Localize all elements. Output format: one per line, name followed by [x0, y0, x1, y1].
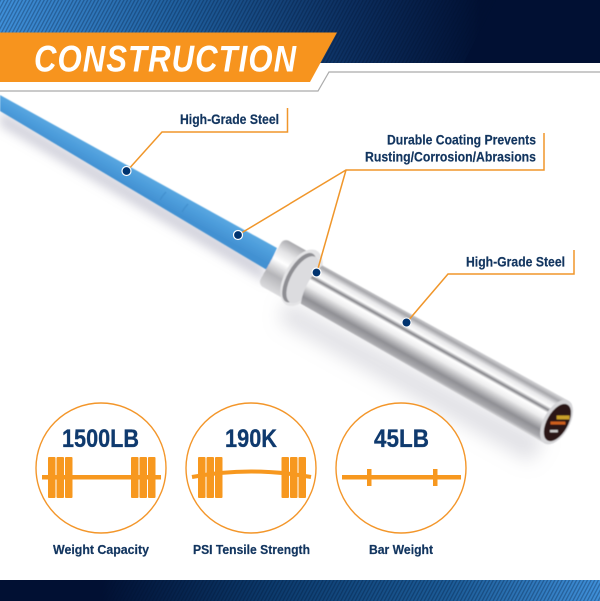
- end cap logo: [557, 415, 570, 419]
- label: High-Grade Steel: [466, 254, 565, 270]
- stat: psi tensile strength: [186, 403, 316, 557]
- icon: bending barbell: [192, 457, 311, 498]
- bottom banner: [0, 580, 600, 601]
- sleeve: [296, 261, 569, 443]
- marker dot on collar: [312, 268, 321, 277]
- marker dot: [122, 166, 131, 176]
- barbell shadow: [0, 110, 545, 462]
- value: 190K: [225, 425, 277, 453]
- icon: empty bar: [342, 469, 461, 486]
- value: 1500LB: [62, 425, 139, 453]
- callout: high-grade steel shaft: [122, 108, 288, 176]
- callout: high-grade steel sleeve: [402, 250, 574, 327]
- barbell photo: [0, 95, 584, 455]
- marker dot: [402, 318, 411, 327]
- steel sleeve assembly: [256, 234, 584, 455]
- top banner: [0, 0, 600, 63]
- collar neck: [258, 238, 317, 303]
- marker dot on shaft: [234, 230, 242, 240]
- blue coated shaft: [0, 95, 277, 270]
- title: CONSTRUCTION: [34, 39, 297, 80]
- caption: PSI Tensile Strength: [193, 543, 310, 557]
- label: High-Grade Steel: [180, 112, 279, 127]
- stat: weight capacity: [36, 403, 166, 557]
- label: Rusting/Corrosion/Abrasions: [365, 150, 536, 164]
- flange: [272, 242, 332, 313]
- caption: Bar Weight: [369, 543, 434, 557]
- label: Durable Coating Prevents: [387, 132, 536, 148]
- caption: Weight Capacity: [53, 543, 149, 557]
- title ribbon: [0, 32, 600, 92]
- callout: durable coating: [234, 132, 544, 277]
- value: 45LB: [374, 425, 429, 453]
- sleeve end cap: [533, 394, 580, 450]
- stat: bar weight: [336, 403, 466, 557]
- icon: loaded barbell: [42, 457, 161, 498]
